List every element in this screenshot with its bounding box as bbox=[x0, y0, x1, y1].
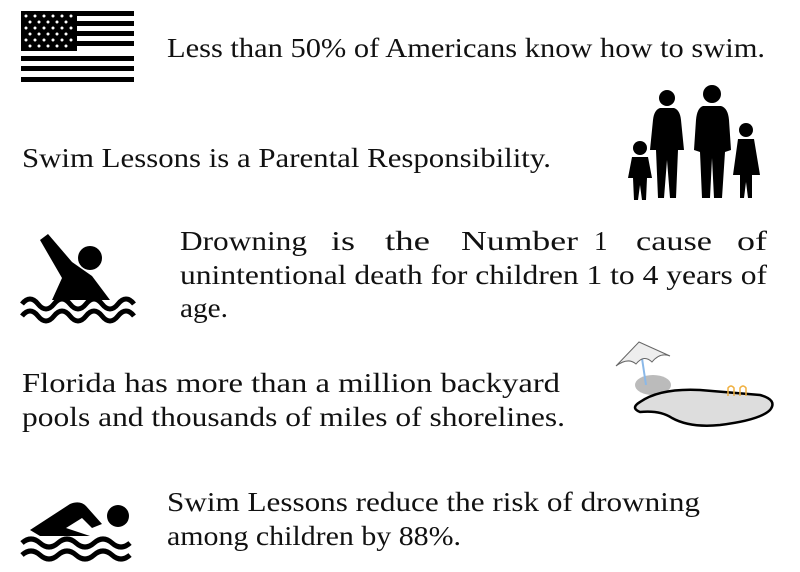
text: drowning statistic: is bbox=[331, 226, 355, 256]
text: swim lessons reduce risk bbox=[167, 487, 700, 551]
text: florida pools: pools and thousands of miles of shorelines. bbox=[22, 402, 565, 432]
text: swim lessons reduce risk: Swim Lessons reduce the risk of drowning bbox=[167, 487, 700, 517]
text: parental responsibility: Swim Lessons is a Parental Responsibility. bbox=[22, 143, 551, 173]
text: swim lessons reduce risk: among children by 88%. bbox=[167, 521, 461, 551]
text: drowning statistic: Drowning bbox=[180, 226, 307, 256]
text: drowning statistic: age. bbox=[180, 293, 228, 323]
text: drowning statistic: Number bbox=[461, 226, 578, 256]
icon: family silhouette bbox=[628, 85, 760, 200]
text: drowning statistic: cause bbox=[636, 226, 712, 256]
icon: swimmer bbox=[22, 502, 130, 559]
text: drowning statistic: 1 bbox=[594, 226, 608, 256]
icon: drowning person bbox=[22, 234, 134, 321]
text: drowning statistic: unintentional death for children 1 to 4 years of bbox=[180, 260, 767, 290]
text: drowning statistic: the bbox=[385, 226, 430, 256]
text: florida pools: Florida has more than a million backyard bbox=[22, 368, 561, 398]
text: drowning statistic bbox=[180, 226, 767, 323]
icon: pool with umbrella bbox=[616, 342, 772, 426]
text: drowning statistic: of bbox=[737, 226, 767, 256]
icon: american flag bbox=[21, 11, 134, 82]
text: florida pools bbox=[22, 368, 565, 432]
text: americans swim: Less than 50% of Americans know how to swim. bbox=[167, 33, 765, 63]
